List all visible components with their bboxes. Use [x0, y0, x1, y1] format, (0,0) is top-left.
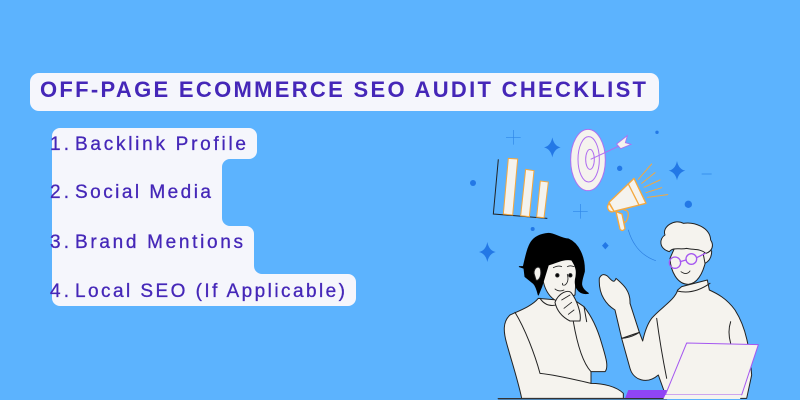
- person: man: [599, 222, 752, 398]
- title: [30, 73, 659, 111]
- icon: target: [571, 129, 631, 191]
- icon: bar chart: [493, 158, 548, 218]
- thin arc: [628, 230, 656, 261]
- item 3: 3.: [50, 232, 69, 253]
- item 4: 4.: [50, 281, 69, 302]
- item 4: Local SEO (If Applicable): [75, 281, 345, 302]
- item 1: 1.: [50, 134, 69, 155]
- illustration: icons: [470, 129, 712, 262]
- icon: megaphone: [607, 164, 668, 231]
- item 1: Backlink Profile: [75, 134, 246, 155]
- item 2: 2.: [50, 182, 69, 203]
- title: OFF-PAGE ECOMMERCE SEO AUDIT CHECKLIST: [40, 77, 647, 102]
- item 3: Brand Mentions: [75, 232, 243, 253]
- panel: checklist: [50, 128, 356, 306]
- illustration: people: [498, 222, 758, 399]
- laptop: [498, 343, 758, 399]
- decorative sparkles and dots: [470, 130, 712, 262]
- item 2: Social Media: [75, 182, 211, 203]
- person: woman: [504, 233, 623, 398]
